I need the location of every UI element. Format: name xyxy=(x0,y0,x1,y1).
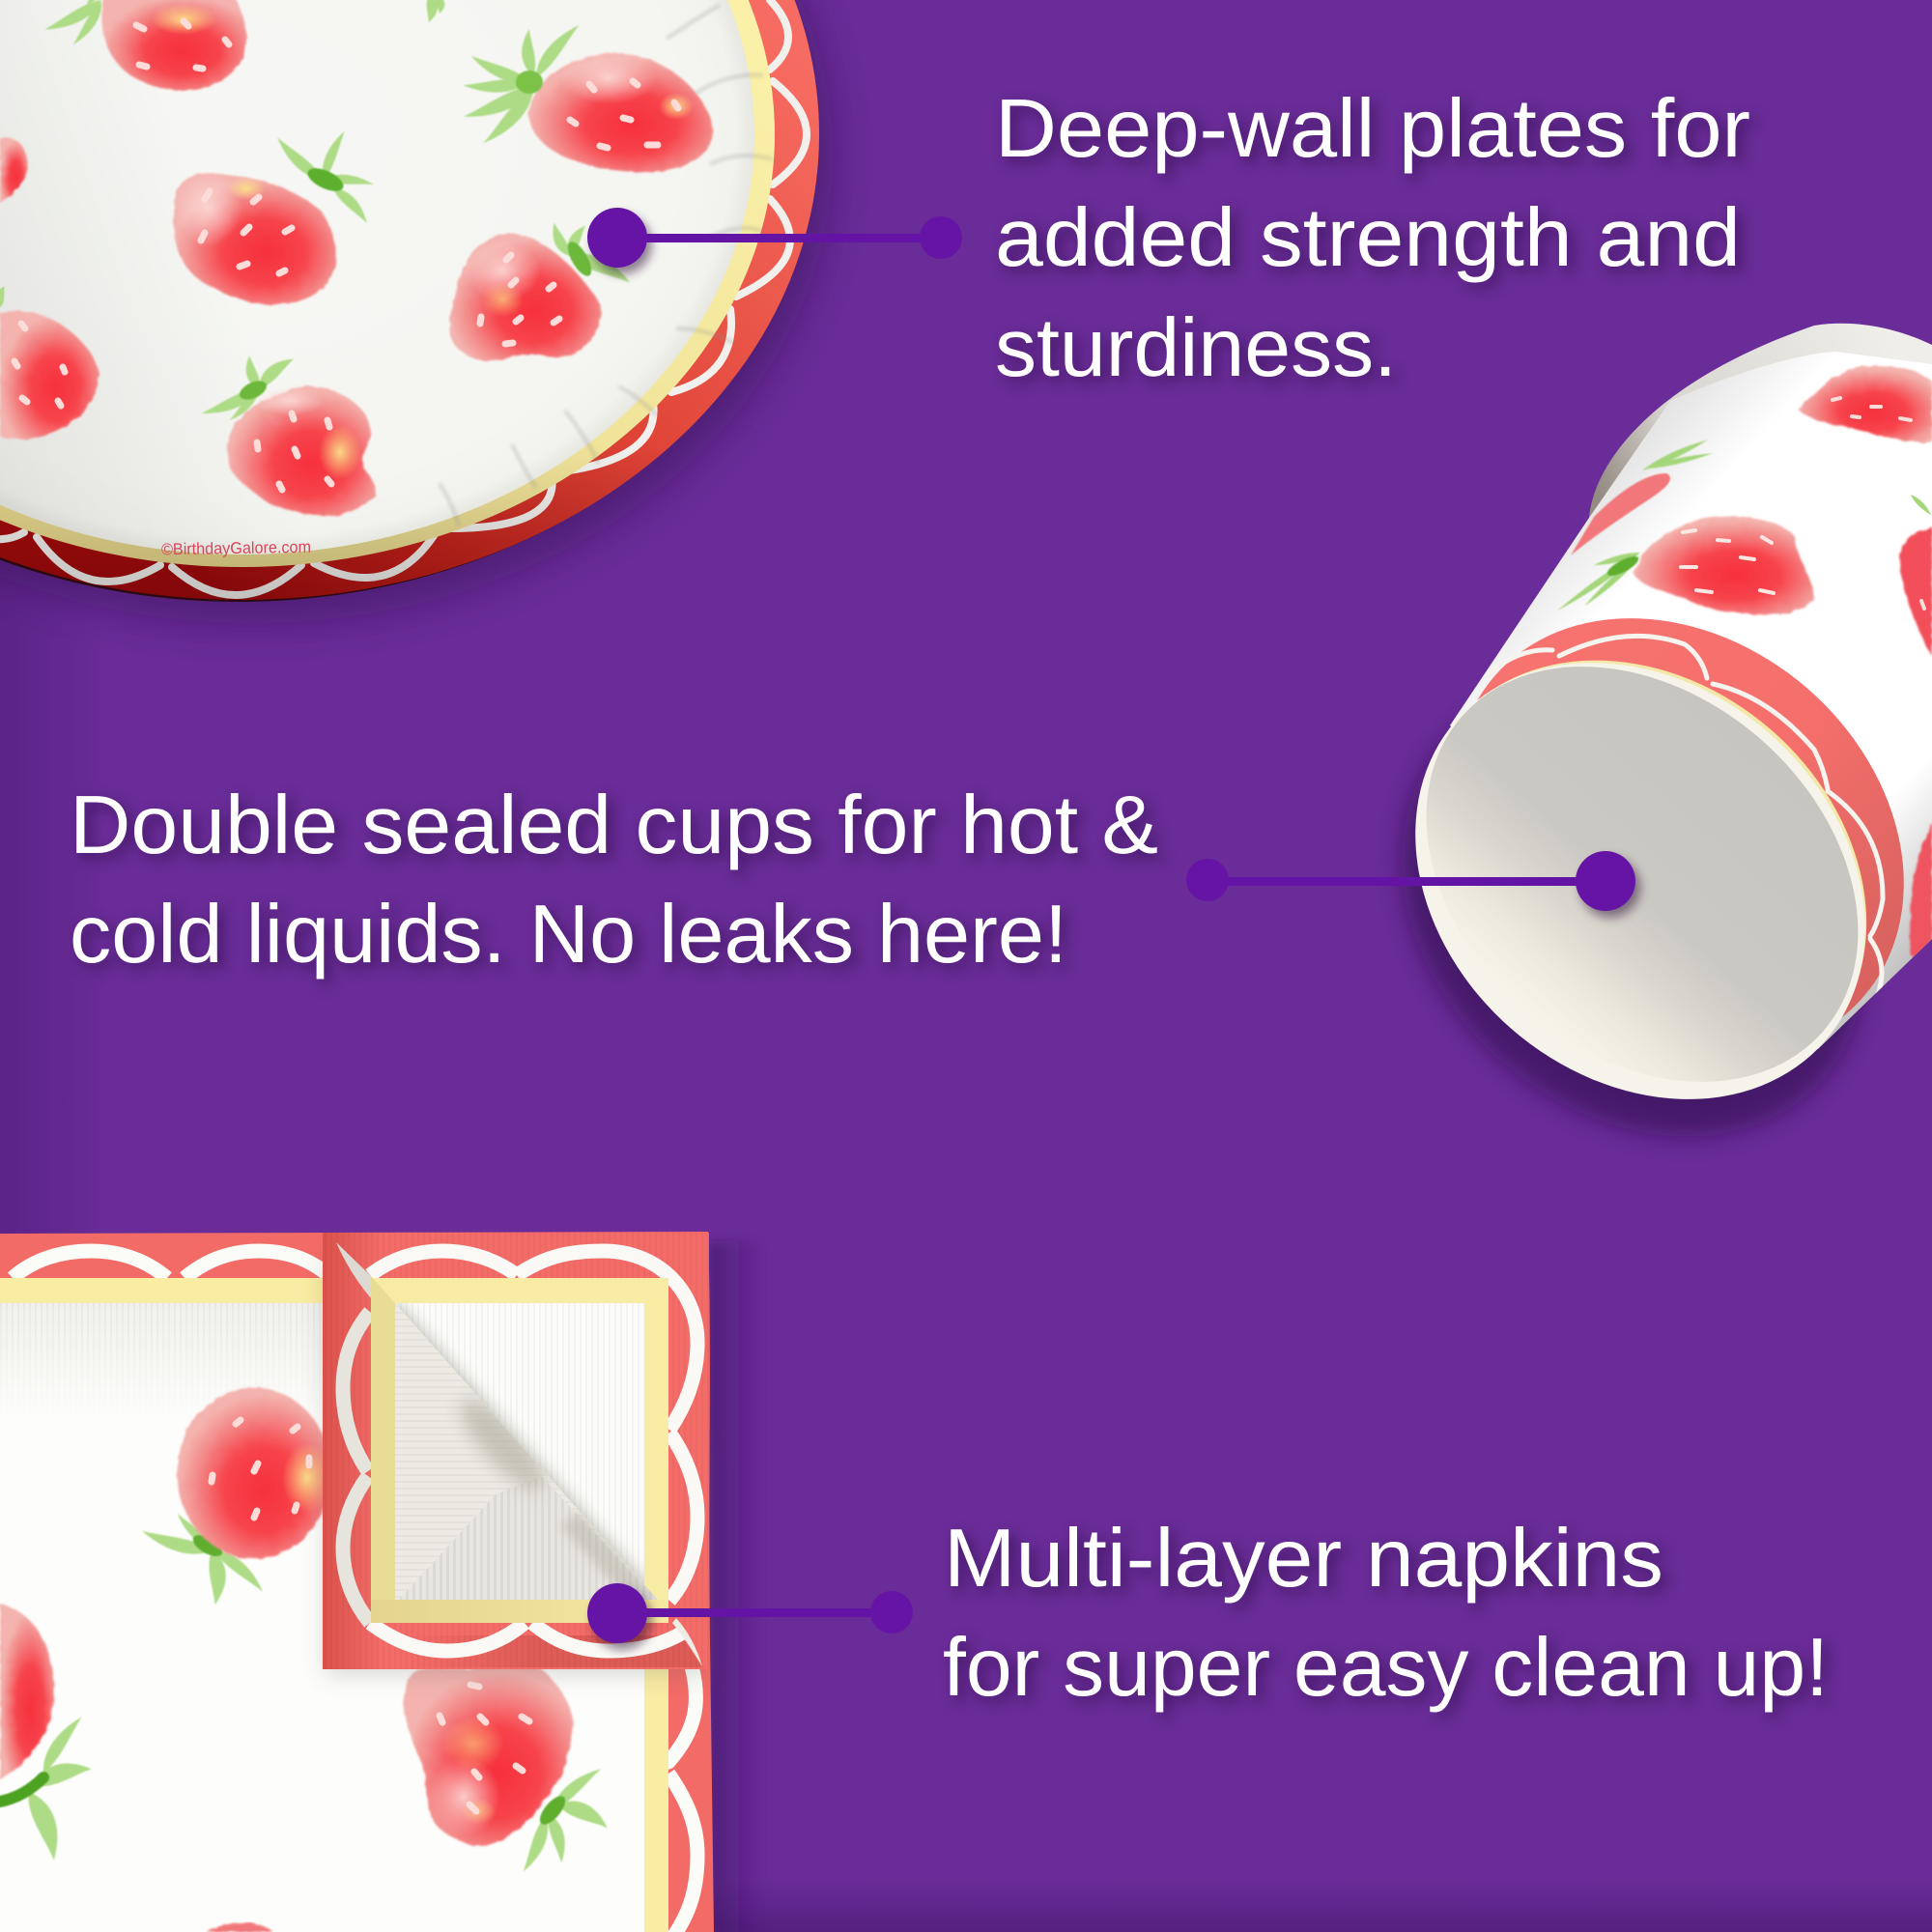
flap scallops xyxy=(370,1251,697,1651)
caption: cups: cold liquids. No leaks here! xyxy=(70,889,1067,980)
napkin xyxy=(0,1232,764,1932)
cup xyxy=(1391,323,1932,1146)
napkin yellow border xyxy=(0,1278,668,1932)
cup strawberry: right xyxy=(1899,493,1932,656)
napkin fold shadow xyxy=(325,1256,705,1675)
plate white centre xyxy=(0,0,754,554)
napkin strawberry: bottom edge xyxy=(207,1923,273,1932)
napkin back scallops xyxy=(13,1251,697,1932)
napkin strawberry: left xyxy=(0,1605,94,1862)
plate shadow xyxy=(0,0,833,623)
cup rim at open end xyxy=(1589,324,1932,518)
corner slivers xyxy=(336,1242,371,1298)
strawberry: top left xyxy=(43,0,246,90)
plate rim shading xyxy=(0,0,819,600)
strawberry: top centre stem xyxy=(423,0,444,23)
caption: plates: Deep-wall plates for xyxy=(995,83,1750,175)
napkin strawberry: bottom right xyxy=(404,1664,612,1875)
callout: napkin pointer xyxy=(587,1583,913,1650)
plate inner shading xyxy=(0,0,754,554)
plate white scallops xyxy=(0,0,807,595)
cup shadow xyxy=(1312,597,1932,1229)
callout: cup pointer xyxy=(1186,851,1640,918)
strawberry: bottom xyxy=(199,353,376,516)
flap yellow frame xyxy=(371,1278,668,1623)
caption: napkins: for super easy clean up! xyxy=(943,1622,1829,1714)
cup strawberry: cut by rim xyxy=(1571,437,1714,555)
napkin white field xyxy=(0,1303,644,1932)
strawberry: mid right xyxy=(450,221,634,361)
plate copyright: ©BirthdayGalore.com xyxy=(161,538,311,558)
caption: plates xyxy=(995,83,1750,394)
cup strawberry: top xyxy=(1798,366,1932,442)
flap red panel xyxy=(323,1233,709,1669)
plate dark underside xyxy=(0,0,814,602)
folded corner: creased patch xyxy=(449,1388,658,1600)
napkin strawberry: upper xyxy=(139,1387,332,1605)
caption: napkins xyxy=(943,1513,1829,1714)
plate yellow ring xyxy=(0,0,775,567)
cup strawberry: centre xyxy=(1555,517,1814,614)
strawberry: centre xyxy=(173,128,375,304)
caption: plates: added strength and xyxy=(995,192,1741,284)
flap fold shading xyxy=(396,1303,644,1584)
cup wall xyxy=(1450,352,1932,1049)
cup strawberry: lower right xyxy=(1910,822,1932,966)
strawberry: top right xyxy=(461,20,713,172)
folded corner xyxy=(395,1303,658,1600)
cup band scallops xyxy=(1490,636,1883,1010)
plate xyxy=(0,0,833,623)
caption: napkins: Multi-layer napkins xyxy=(944,1513,1663,1605)
cup base floor xyxy=(1344,582,1932,1167)
napkin right edge shadow xyxy=(708,1241,764,1932)
napkin folded flap xyxy=(323,1233,709,1669)
plate creases xyxy=(440,5,773,526)
cup strawberries xyxy=(1555,366,1932,966)
folded corner: ribbed lower part xyxy=(399,1476,658,1600)
caption: plates: sturdiness. xyxy=(995,302,1397,394)
cup red band xyxy=(1477,618,1904,1018)
strawberry: left edge xyxy=(0,137,28,203)
caption: cups xyxy=(70,780,1158,980)
cup base rim xyxy=(1332,571,1932,1183)
strawberry: left lower xyxy=(0,284,99,440)
napkin red sheet xyxy=(0,1232,714,1932)
flap white field xyxy=(395,1303,644,1600)
callout: plate pointer xyxy=(587,208,962,274)
caption: cups: Double sealed cups for hot & xyxy=(70,780,1158,871)
plate red rim xyxy=(0,0,819,600)
